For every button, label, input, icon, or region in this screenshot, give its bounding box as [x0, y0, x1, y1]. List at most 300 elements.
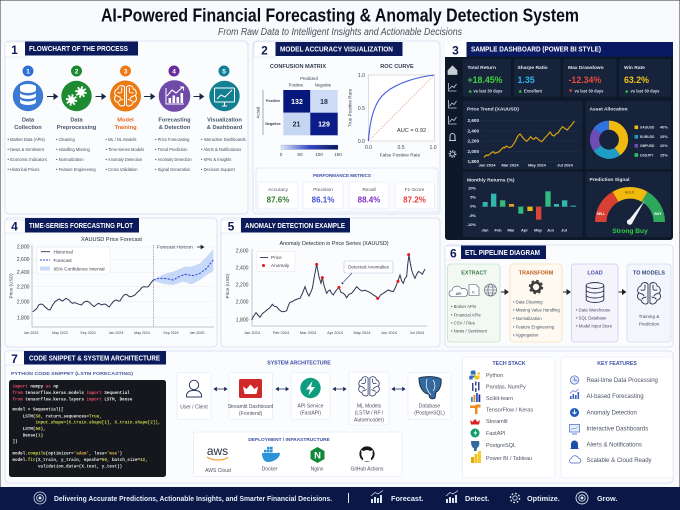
heading: section 5: ANOMALY DETECTION EXAMPLE	[245, 223, 345, 230]
ROC curve: 0.0	[365, 145, 372, 151]
legend	[37, 247, 110, 274]
ETL: transform: • Aggregation	[513, 333, 539, 338]
icon and text: forecast	[371, 490, 423, 503]
step 4: forecasting and detection	[155, 66, 192, 172]
heading: section 7: CODE SNIPPET & SYSTEM ARCHITECTURE	[29, 356, 160, 362]
icon: scikit-learn: Scikit-learn	[486, 396, 513, 402]
arrow	[96, 94, 106, 99]
confusion matrix	[256, 64, 342, 157]
forecast chart: Price (USD)	[8, 273, 14, 299]
forecast chart: XAUUSD Price Forecast	[81, 237, 142, 243]
anomaly chart: Jul 2024	[410, 330, 425, 335]
heading: section 6: ETL PIPELINE DIAGRAM	[465, 250, 540, 257]
chart: prediction signal gauge: BUY	[654, 212, 662, 216]
node: API service: (FastAPI)	[300, 410, 321, 416]
step 1: data collection: • Market Data (APIs)	[8, 137, 46, 142]
confusion matrix: Predicted	[300, 76, 319, 81]
feature: alerts and notifications: Alerts & Notifications	[586, 442, 642, 448]
forecast chart: Jan 2025	[190, 331, 204, 335]
chart: asset allocation: EURUSD	[640, 135, 655, 139]
tech stack: TECH STACK	[492, 361, 526, 367]
footer divider	[348, 493, 350, 503]
code block: ])	[12, 440, 18, 445]
step 5: visualization and dashboard: 5	[222, 68, 226, 75]
node: API service	[291, 372, 330, 420]
anomaly chart: Jun 2024	[381, 330, 398, 335]
confusion matrix: 132	[291, 99, 303, 106]
chart: monthly returns	[463, 172, 583, 237]
metric: precision: 86.1%	[312, 196, 334, 204]
step 2: data preprocessing: • Normalization	[56, 157, 84, 162]
forecast chart: Sep 2024	[163, 331, 179, 335]
node: database: Database	[419, 404, 440, 410]
KPI: win rate: 63.2%	[624, 75, 649, 85]
chart: prediction signal gauge: Prediction Signal	[590, 177, 630, 183]
icon: nginx: N	[314, 450, 321, 461]
confusion matrix: Negative	[265, 122, 281, 126]
chart: monthly returns: May	[534, 228, 543, 232]
ROC curve	[348, 64, 437, 158]
heading: section 2: MODEL ACCURACY VISUALIZATION	[280, 46, 393, 54]
ETL: extract	[448, 264, 500, 342]
KPI: sharpe ratio: Excellent	[524, 88, 543, 93]
icon: tensorflow: TensorFlow / Keras	[486, 408, 533, 414]
forecast chart: 2,800	[17, 244, 30, 250]
footer logo	[34, 492, 46, 504]
node: database	[408, 372, 451, 420]
anomaly chart	[225, 241, 427, 335]
metric: F1 score: 87.2%	[403, 196, 426, 204]
code block: input_shape=(X_train.shape[1], X_train.shape[2]),	[12, 421, 160, 426]
forecast chart: Jan 2023	[24, 331, 38, 335]
heading: section 1: 1	[11, 43, 18, 57]
code block: model = Sequential([	[12, 408, 64, 413]
ETL: extract: • Financial APIs	[451, 312, 481, 317]
panel: time-series forecasting plot	[5, 218, 217, 347]
code block: model.fit(X_train, y_train, epochs=50, batch_size=32,	[12, 458, 148, 463]
chart: asset allocation: 15%	[660, 152, 668, 157]
feature: interactive dashboards: Interactive Dashboards	[586, 426, 648, 432]
node: streamlit dashboard: Streamlit Dashboard	[228, 404, 274, 410]
metric: recall	[349, 182, 389, 209]
heading: section 6	[445, 246, 546, 260]
step 1: data collection	[8, 66, 47, 172]
forecast chart: 1,800	[17, 315, 30, 321]
ROC curve: False Positive Rate	[380, 152, 421, 158]
chart: prediction signal gauge: SELL	[597, 212, 605, 216]
ETL: transform: • Feature Engineering	[513, 324, 555, 329]
KPI: max drawdown: Max Drawdown	[568, 65, 604, 71]
panel: flowchart of the process	[5, 41, 248, 214]
step 1: data collection: • Economic Indicators	[8, 157, 47, 162]
arrow	[144, 94, 154, 99]
icon and text: grow: Grow.	[597, 494, 617, 503]
icon: AWS cloud	[205, 444, 231, 474]
legend: 95% Confidence Interval	[54, 266, 105, 272]
heading: section 3	[445, 42, 673, 58]
ETL: load: LOAD	[587, 270, 603, 276]
feature: scalable and cloud ready: Scalable & Cloud Ready	[586, 458, 652, 464]
heading: section 4: TIME-SERIES FORECASTING PLOT	[29, 223, 134, 230]
panel: anomaly detection example	[221, 218, 440, 347]
chart: prediction signal gauge: HOLD	[625, 190, 635, 194]
step 1: data collection: • Historical Prices	[8, 167, 39, 172]
confusion matrix: 50	[297, 152, 303, 157]
node: user / client: User / Client	[180, 405, 208, 411]
KPI: max drawdown: vs last 30 days	[574, 88, 604, 93]
feature: anomaly detection: Anomaly Detection	[586, 410, 637, 416]
legend: Historical	[54, 250, 73, 254]
icon: AWS cloud: aws	[207, 444, 228, 458]
node: database: (PostgreSQL)	[414, 410, 445, 416]
step 3: model training: • Anomaly Detection	[106, 157, 143, 162]
feature: AI-based forecasting: AI-based Forecasting	[586, 394, 644, 400]
metric: precision: Precision	[313, 187, 333, 193]
footer banner	[0, 487, 680, 510]
node: API service: API Service	[297, 404, 324, 410]
dashboard sidebar icons	[448, 66, 457, 157]
heading: section 3: SAMPLE DASHBOARD (POWER BI STYLE)	[471, 46, 601, 54]
code block: validation_data=(X_test, y_test))	[12, 464, 122, 469]
node: ML models: ML Models	[357, 404, 382, 410]
code block: model.compile(optimizer='adam', loss='mse')	[12, 451, 122, 456]
panel: code snippet and system architecture	[5, 351, 673, 483]
arrow	[214, 387, 227, 391]
arrow	[618, 290, 626, 294]
confusion matrix: Actual	[256, 107, 260, 118]
ETL: extract: • Broker APIs	[451, 304, 476, 309]
chart: monthly returns: Mar	[507, 228, 515, 232]
ROC curve: 1.0	[358, 73, 365, 79]
KPI: total return	[463, 59, 511, 97]
chart: price trend: 2,000	[468, 149, 479, 154]
icon: nginx: Nginx	[311, 466, 324, 472]
icon: docker: Docker	[262, 466, 278, 472]
heading: section 7: 7	[11, 352, 18, 366]
anomaly chart: 2,200	[236, 282, 249, 288]
chart: monthly returns: Jun	[547, 228, 555, 232]
code block: import numpy as np	[12, 384, 59, 389]
performance metrics	[256, 168, 438, 212]
legend	[257, 252, 295, 272]
chart: monthly returns: 5%	[470, 194, 476, 200]
step 2: data preprocessing: Data	[70, 118, 84, 124]
heading: section 1	[5, 42, 138, 57]
code block	[9, 380, 166, 477]
chart: monthly returns: Jul	[561, 228, 567, 232]
heading: section 3: 3	[452, 44, 459, 58]
ETL: extract: EXTRACT	[461, 270, 487, 276]
icon: github actions: GitHub Actions	[350, 466, 384, 472]
step 4: forecasting and detection: • Trend Prediction	[155, 147, 188, 152]
chart: monthly returns: -10%	[467, 222, 476, 227]
icon: nginx	[310, 447, 324, 472]
node: user / client	[177, 372, 211, 420]
step 5: visualization and dashboard: • KPIs & Insights	[201, 157, 231, 162]
key features: KEY FEATURES	[597, 361, 637, 367]
tech stack	[462, 357, 555, 478]
arrow	[501, 290, 508, 294]
icon and text: detect	[446, 490, 489, 503]
metric: accuracy	[258, 182, 298, 209]
confusion matrix: 150	[334, 152, 342, 157]
ROC curve: 0.5	[397, 145, 405, 151]
forecast chart: Jan 2024	[109, 331, 123, 335]
chart: price trend: 1,800	[468, 159, 479, 164]
code block: from tensorflow.keras.layers import LSTM, Dense	[12, 397, 133, 402]
anomaly chart: 2,000	[236, 300, 249, 306]
chart: asset allocation: USDJPY	[640, 153, 654, 157]
step 2: data preprocessing	[56, 66, 97, 172]
chart: monthly returns: 0%	[470, 204, 476, 208]
confusion matrix: 18	[320, 99, 328, 106]
confusion matrix: 0	[280, 152, 283, 157]
legend: Anomaly	[271, 263, 290, 268]
step 4: forecasting and detection: • Anomaly Detection	[155, 157, 192, 162]
step 2: data preprocessing: 2	[75, 68, 79, 75]
chart: price trend: 2,600	[468, 118, 479, 123]
ETL: transform: • Normalization	[513, 316, 542, 321]
code block: LSTM(50, return_sequences=True,	[12, 414, 102, 419]
icon: github actions	[350, 446, 384, 472]
node: ML models: (LSTM / RF /	[355, 410, 384, 416]
anomaly chart: Price (USD)	[225, 273, 230, 299]
chart: price trend: Jan 2024	[479, 162, 496, 168]
KPI: win rate: Win Rate	[624, 65, 645, 71]
forecast chart: 2,200	[17, 284, 30, 290]
confusion matrix: 129	[318, 122, 330, 128]
arrow	[194, 94, 204, 99]
KPI: total return: Total Return	[468, 65, 496, 71]
anomaly chart: May 2024	[353, 330, 371, 335]
forecast chart: 2,000	[17, 299, 30, 305]
footer message: Delivering Accurate Predictions, Actionable Insights, and Smarter Financial Decisions.	[54, 494, 332, 503]
subtitle: From Raw Data to Intelligent Insights and Actionable Decisions	[218, 27, 462, 38]
icon: postgresql: PostgreSQL	[486, 443, 516, 449]
step 2: data preprocessing: • Feature Engineering	[56, 167, 96, 172]
step 4: forecasting and detection: • Price Forecasting	[155, 137, 190, 142]
KPI: total return: vs last 30 days	[474, 88, 503, 93]
chart: price trend	[463, 101, 583, 169]
performance metrics: PERFORMANCE METRICS	[313, 173, 371, 178]
chart: asset allocation	[586, 101, 671, 169]
legend: Forecast	[54, 258, 72, 263]
metric: precision	[303, 182, 343, 209]
icon: fastapi: FastAPI	[486, 431, 506, 437]
forecast chart: Forecast Horizon	[157, 245, 193, 250]
arrow	[47, 94, 58, 99]
chart: monthly returns: Feb	[494, 228, 502, 232]
code heading: PYTHON CODE SNIPPET (LSTM FORECASTING)	[11, 371, 133, 377]
feature: real-time data processing: Real-time Data Processing	[586, 378, 658, 384]
forecast chart: Sep 2023	[80, 331, 96, 335]
step 1: data collection: 1	[26, 68, 30, 75]
chart: monthly returns: -5%	[469, 213, 476, 218]
KPI: total return: +18.45%	[468, 75, 503, 85]
heading: section 6: 6	[450, 246, 457, 260]
icon: streamlit: Streamlit	[486, 419, 508, 425]
anomaly chart: Jan 2024	[244, 330, 261, 335]
icon and text: grow	[576, 492, 617, 504]
node: ML models: Autoencoder)	[354, 418, 384, 424]
chart: asset allocation: 25%	[660, 134, 668, 139]
ETL: to models: Prediction	[639, 322, 660, 326]
chart: prediction signal gauge	[586, 172, 671, 237]
chart: price trend: Price Trend (XAUUSD)	[467, 106, 519, 112]
legend: Price	[271, 255, 282, 260]
node: ML models	[349, 372, 389, 425]
heading: section 2: 2	[261, 44, 268, 58]
forecast chart: May 2024	[134, 331, 150, 335]
forecast chart	[8, 237, 214, 335]
chart: asset allocation: GBPUSD	[640, 144, 655, 148]
step 3: model training: • Cross Validation	[106, 167, 138, 172]
KPI: sharpe ratio: 1.35	[518, 75, 535, 85]
icon: power BI: Power BI / Tableau	[486, 456, 532, 462]
heading: section 4: 4	[11, 220, 18, 234]
chart: price trend: May 2024	[528, 162, 547, 168]
anomaly chart: Feb 2024	[273, 330, 290, 335]
step 1: data collection: Collection	[14, 125, 42, 131]
step 4: forecasting and detection: • Signal Generation	[155, 167, 191, 172]
anomaly chart: Anomaly Detection in Price Series (XAUUSD)	[279, 241, 389, 247]
anomaly chart: 2,600	[236, 248, 249, 254]
anomaly chart: Apr 2024	[327, 330, 344, 335]
ROC curve: ROC CURVE	[380, 64, 414, 70]
metric: F1 score	[395, 182, 434, 209]
ETL: extract: P..	[472, 290, 476, 294]
KPI: max drawdown	[563, 59, 617, 97]
chart: monthly returns: Jan	[482, 228, 489, 232]
chart: asset allocation: 20%	[660, 143, 668, 148]
confusion matrix: 21	[293, 122, 300, 128]
confusion matrix: Positive	[266, 99, 280, 103]
heading: section 5	[221, 218, 350, 234]
ETL: load: • SQL Database	[576, 316, 607, 320]
ROC curve: 1.0	[429, 145, 437, 151]
forecast chart: May 2023	[52, 331, 68, 335]
ETL: extract: • CSV / Files	[451, 320, 475, 326]
KPI: max drawdown: -12.34%	[568, 75, 601, 85]
chart: price trend: Mar 2024	[501, 162, 519, 168]
icon and text: optimize: Optimize.	[527, 494, 560, 503]
arrow	[276, 387, 288, 391]
chart: prediction signal gauge: Strong Buy	[612, 228, 648, 235]
step 5: visualization and dashboard: & Dashboard	[207, 125, 243, 131]
metric: recall: Recall	[362, 187, 376, 193]
metric: accuracy: Accuracy	[268, 187, 288, 193]
icon and text: optimize	[510, 493, 560, 503]
step 3: model training	[106, 66, 144, 172]
arrow	[563, 290, 570, 294]
anomaly chart: Mar 2024	[300, 330, 317, 335]
heading: section 2	[254, 42, 402, 58]
step 4: forecasting and detection: Forecasting	[158, 118, 191, 124]
chart: asset allocation: 40%	[660, 125, 668, 130]
heading: section 4	[5, 218, 139, 234]
code block: LSTM(50),	[12, 427, 46, 432]
step 3: model training: • ML / DL Models	[106, 137, 136, 142]
icon and text: detect: Detect.	[465, 494, 489, 503]
KPI: sharpe ratio	[514, 59, 561, 97]
chart: monthly returns: Apr	[521, 228, 528, 232]
icon: pandas: Pandas, NumPy	[486, 384, 526, 390]
heading: section 5: 5	[228, 220, 235, 234]
step 5: visualization and dashboard: • Alerts & Notifications	[201, 147, 241, 152]
step 5: visualization and dashboard: Visualization	[207, 118, 242, 124]
anomaly chart: 1,800	[236, 318, 249, 324]
step 5: visualization and dashboard: • Decision Support	[201, 167, 236, 172]
arrow	[392, 387, 405, 391]
anomaly chart: 2,400	[236, 266, 249, 272]
chart: monthly returns: Monthly Returns (%)	[467, 177, 515, 183]
chart: price trend: 2,400	[468, 128, 479, 134]
chart: asset allocation: Asset Allocation	[590, 106, 628, 112]
chart: price trend: Jul 2024	[557, 162, 574, 168]
ROC curve: 0.0	[358, 139, 365, 145]
ETL: transform: TRANSFORM	[519, 270, 554, 276]
panel: ETL pipeline diagram	[445, 245, 673, 347]
node: streamlit dashboard	[228, 372, 274, 420]
ROC curve: 0.5	[358, 106, 365, 112]
ETL: to models: Training &	[639, 314, 659, 319]
ETL: transform	[510, 264, 562, 342]
chart: asset allocation: XAUUSD	[640, 126, 655, 130]
ETL: load: • Model Input Store	[576, 324, 613, 328]
confusion matrix: CONFUSION MATRIX	[270, 64, 326, 70]
KPI: win rate: vs last 30 days	[630, 88, 660, 93]
system architecture heading: SYSTEM ARCHITECTURE	[267, 361, 331, 367]
code block: Dense(1)	[12, 433, 43, 438]
ETL: extract: • News / Sentiment	[451, 329, 488, 334]
step 2: data preprocessing: • Cleaning	[56, 137, 75, 142]
metric: recall: 88.4%	[358, 196, 380, 204]
ROC curve: AUC = 0.92	[397, 128, 426, 134]
icon: AWS cloud: AWS Cloud	[205, 468, 231, 474]
callout: detected anomalies	[342, 261, 393, 284]
node: streamlit dashboard: (Frontend)	[239, 411, 263, 417]
metric: F1 score: F1-Score	[405, 187, 425, 193]
KPI: sharpe ratio: Sharpe Ratio	[518, 65, 548, 71]
step 1: data collection: Data	[22, 118, 35, 124]
step 5: visualization and dashboard	[201, 66, 246, 172]
step 4: forecasting and detection: & Detection	[159, 125, 191, 131]
ETL: extract: API	[456, 292, 461, 296]
ROC curve: True Positive Rate	[348, 88, 352, 127]
code block: from tensorflow.keras.models import Sequential	[12, 391, 130, 396]
arrow	[333, 387, 346, 391]
step 2: data preprocessing: Preprocessing	[57, 125, 97, 131]
ETL: load: • Data Warehouse	[576, 308, 611, 312]
callout: detected anomalies: Detected Anomalies	[348, 265, 390, 270]
ETL: to models	[627, 264, 671, 342]
KPI: win rate	[619, 59, 671, 97]
panel: model accuracy visualization	[253, 41, 440, 214]
forecast chart: 2,600	[17, 257, 30, 263]
forecast chart: 2,400	[17, 270, 30, 276]
step 3: model training: Training	[114, 125, 137, 131]
confusion matrix: Negative	[315, 83, 332, 88]
heading: section 1: FLOWCHART OF THE PROCESS	[29, 46, 128, 53]
deployment / infrastructure: DEPLOYMENT / INFRASTRUCTURE	[248, 437, 331, 443]
icon: python: Python	[486, 373, 503, 379]
icon and text: forecast: Forecast.	[391, 494, 423, 503]
ETL: to models: TO MODELS	[633, 270, 665, 276]
confusion matrix: 100	[315, 152, 323, 157]
step 5: visualization and dashboard: • Interactive Dashboards	[201, 137, 246, 142]
step 3: model training: 3	[124, 68, 128, 75]
step 3: model training: • Time-Series Models	[106, 147, 144, 152]
